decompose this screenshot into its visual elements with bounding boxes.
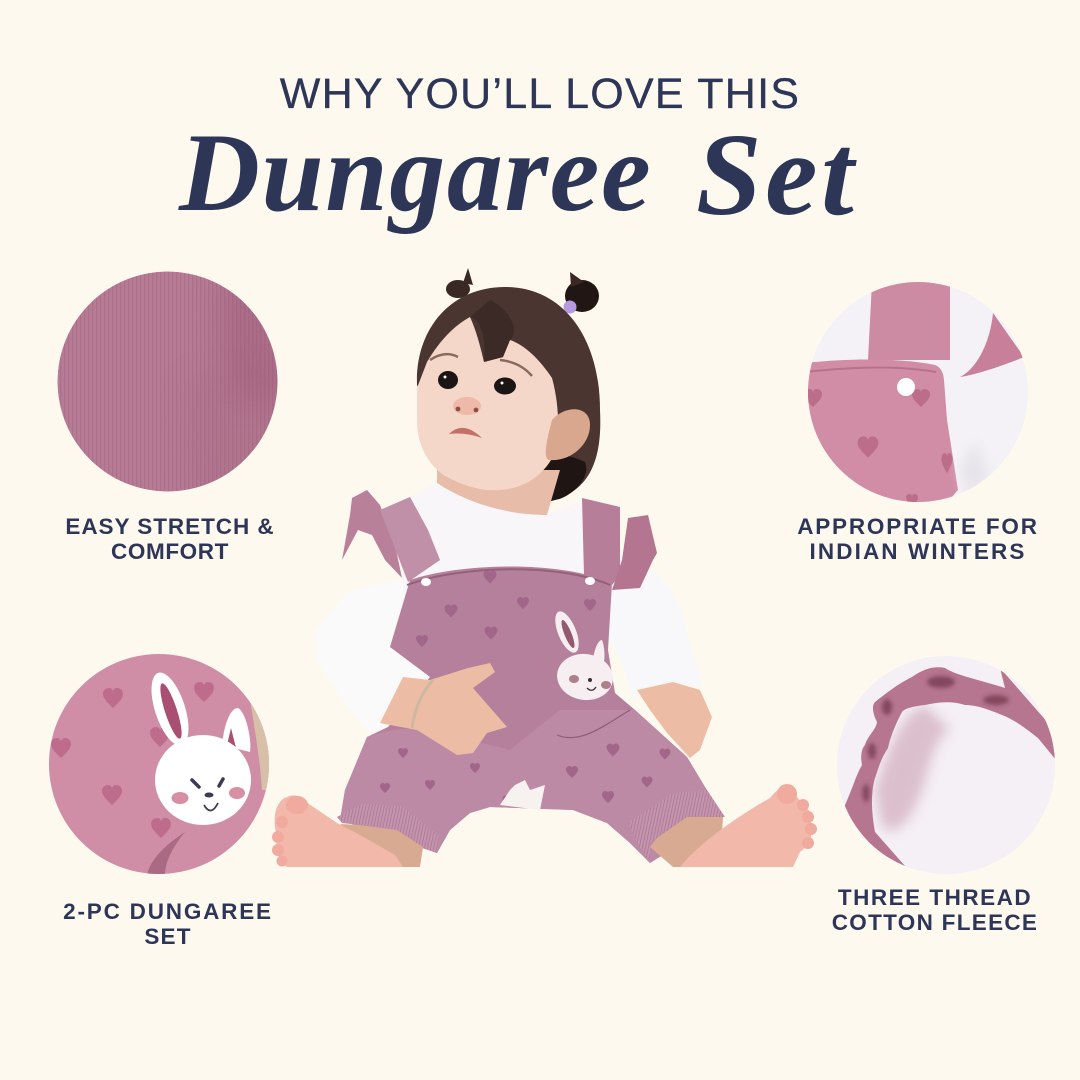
left frill — [342, 490, 402, 578]
hearts on dungaree — [380, 570, 670, 804]
label: three thread cotton fleece: THREE THREAD — [838, 885, 1032, 910]
circle: bunny applique — [45, 650, 275, 880]
left strap — [380, 497, 440, 582]
circle: fabric swatch — [58, 272, 290, 500]
label: easy stretch: EASY STRETCH & — [65, 514, 275, 539]
left hand — [380, 663, 507, 755]
circle: strap and button detail — [804, 280, 1031, 506]
label: appropriate for indian winters: INDIAN WINTERS — [810, 539, 1026, 564]
right cuff — [628, 790, 725, 863]
hair — [417, 287, 600, 502]
bib seam and buttons — [407, 569, 630, 738]
right ankle — [650, 817, 723, 867]
nose and mouth — [449, 397, 482, 438]
circle: cotton fleece frill — [835, 655, 1057, 880]
hair shadow — [544, 456, 586, 501]
right strap — [582, 498, 620, 585]
shirt torso — [400, 483, 622, 595]
left pigtail — [446, 268, 473, 298]
hair strands — [470, 300, 514, 362]
title: Set: Set — [696, 109, 857, 240]
right frill — [612, 515, 657, 590]
neck — [437, 470, 560, 515]
left sleeve — [315, 580, 430, 733]
label: appropriate for indian winters: APPROPRIATE FOR — [797, 514, 1039, 539]
bunny on bib — [555, 611, 613, 700]
label: three thread cotton fleece — [832, 885, 1038, 935]
illustration: baby wearing dungaree — [272, 268, 817, 867]
right sleeve — [608, 570, 703, 705]
left cuff — [337, 803, 440, 853]
title: Dungaree: Dungaree — [179, 111, 652, 235]
right pigtail — [564, 272, 599, 314]
left foot — [272, 795, 403, 867]
title: why you'll love this: WHY YOU’LL LOVE THIS — [280, 70, 800, 118]
label: appropriate for indian winters — [797, 514, 1039, 564]
eyes and brows — [430, 354, 532, 394]
label: 2-pc dungaree set: 2-PC DUNGAREE — [63, 899, 273, 924]
face — [417, 317, 558, 490]
label: 2-pc dungaree set — [63, 899, 273, 949]
left ankle — [340, 824, 423, 867]
illustration: circles and baby — [49, 268, 1055, 874]
right hand — [637, 682, 712, 758]
bangle — [412, 680, 433, 728]
label: 2-pc dungaree set: SET — [144, 924, 192, 949]
dungaree body — [340, 566, 723, 863]
ear — [546, 409, 590, 460]
label: easy stretch: COMFORT — [111, 539, 229, 564]
label: easy stretch — [65, 514, 275, 564]
pants lighter — [340, 710, 723, 863]
label: three thread cotton fleece: COTTON FLEECE — [832, 910, 1038, 935]
white tuft — [500, 780, 545, 810]
right foot — [680, 784, 817, 867]
